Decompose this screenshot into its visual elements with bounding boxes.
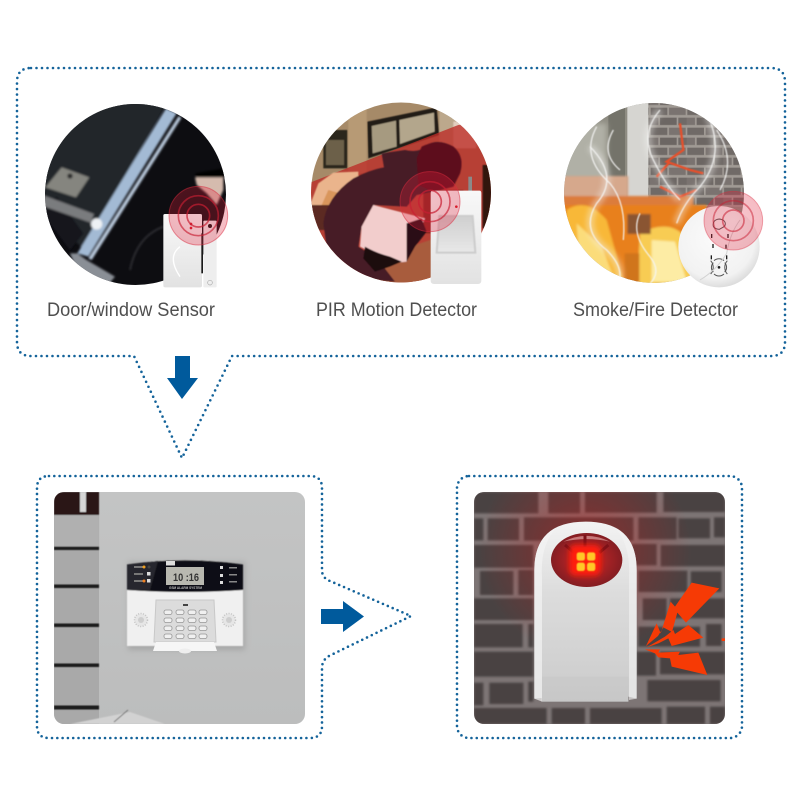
door/window sensor illustration — [40, 100, 230, 290]
smoke detector — [678, 206, 760, 287]
logo and caption — [166, 561, 175, 566]
speakers — [134, 614, 148, 626]
panel: control panel speech bubble — [37, 476, 411, 738]
status LEDs — [134, 566, 237, 584]
intruder body — [323, 142, 461, 282]
control panel photo — [54, 492, 305, 724]
smoke/fire detector illustration — [560, 100, 763, 293]
arrow: right to siren — [321, 601, 364, 632]
stand flap — [153, 642, 217, 651]
siren housing — [534, 522, 637, 702]
LED cluster — [577, 552, 595, 571]
arrow: down to control panel — [167, 356, 198, 399]
panel: siren frame — [457, 476, 742, 738]
keypad cover — [154, 600, 216, 642]
control panel photo: 10 :16 — [173, 572, 199, 584]
PIR motion detector illustration — [311, 102, 491, 284]
dome — [551, 533, 622, 587]
PIR sensor — [468, 177, 472, 191]
label: door/window sensor: Door/window Sensor — [47, 299, 215, 321]
label: PIR motion detector: PIR Motion Detector — [316, 299, 477, 321]
label: smoke/fire detector: Smoke/Fire Detector — [573, 299, 738, 321]
LCD — [166, 567, 204, 585]
panel: sensors speech bubble — [17, 68, 785, 458]
control panel photo: GSM ALARM SYSTEM — [169, 586, 202, 590]
alarm body — [127, 560, 243, 646]
icon: sound bolts — [645, 583, 725, 675]
siren photo — [474, 492, 725, 724]
sensor body — [163, 214, 202, 287]
